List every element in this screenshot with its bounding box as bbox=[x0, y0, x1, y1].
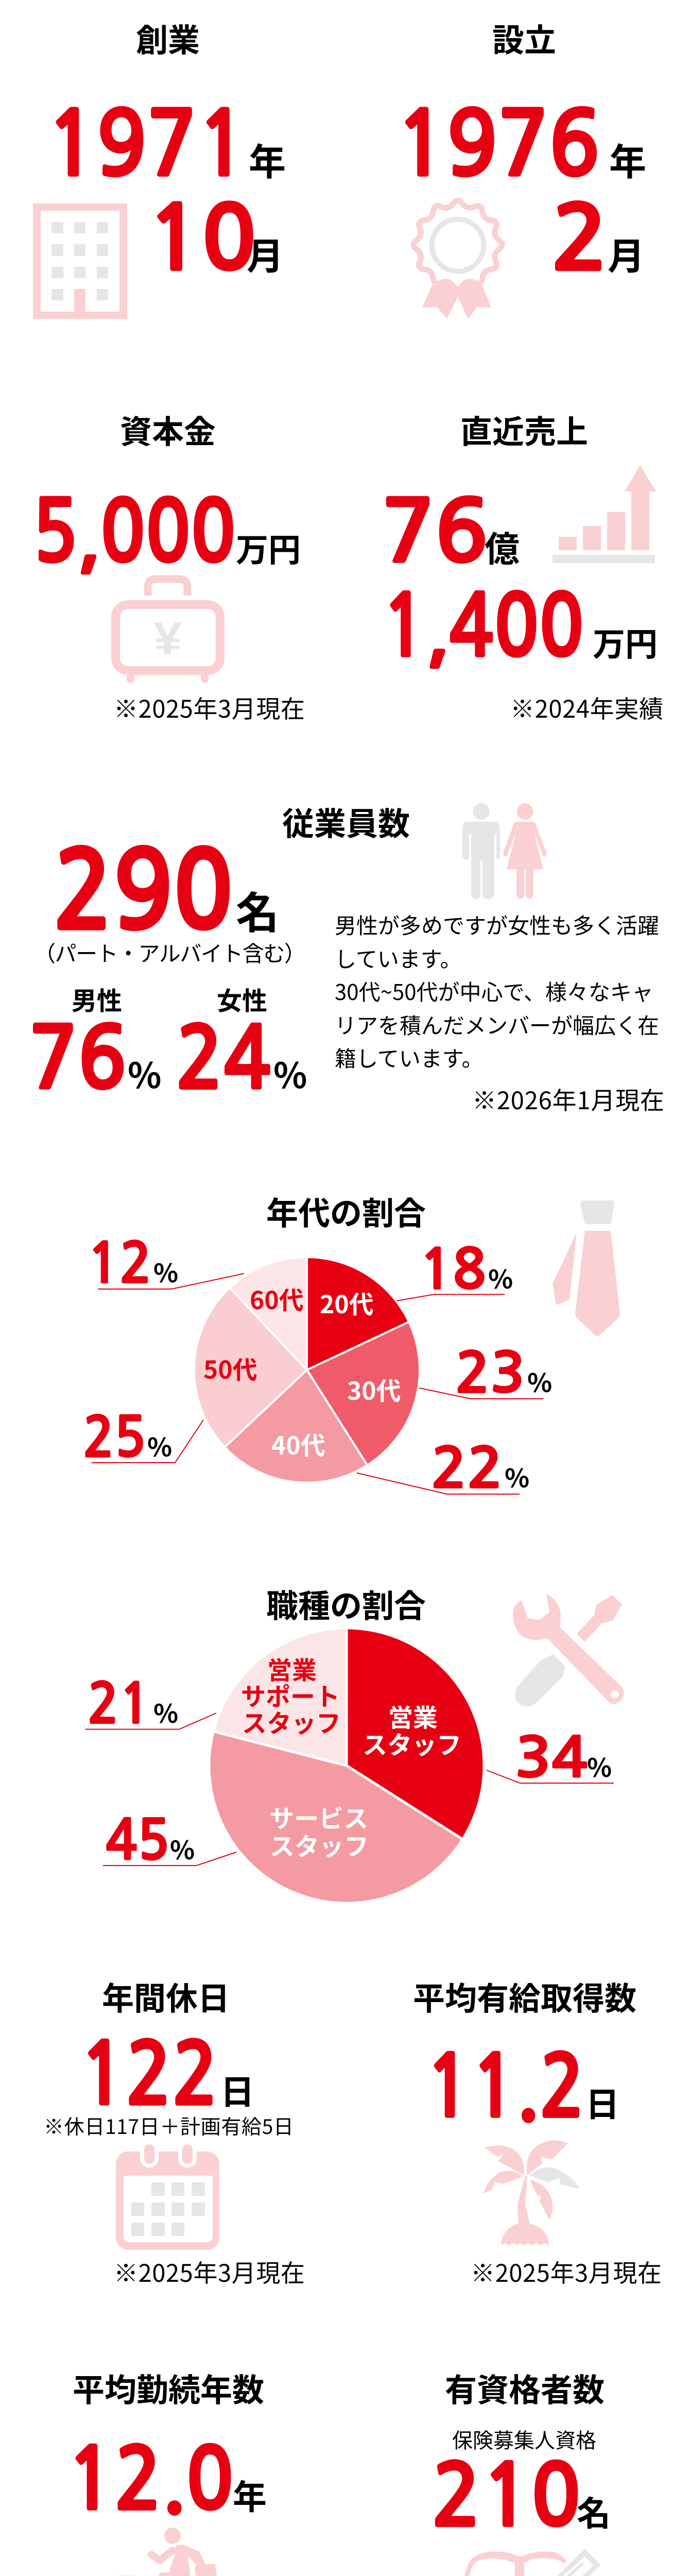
callout: 22 percent: 22 bbox=[431, 1442, 503, 1496]
panel: recent sales bbox=[382, 406, 663, 725]
panel: age ratio bbox=[83, 1188, 620, 1496]
icon: rising bar chart bbox=[553, 465, 656, 563]
pie labels: job types: スタッフ bbox=[363, 1725, 461, 1761]
number: 1976 year: 年 bbox=[609, 132, 646, 186]
callout: 22 percent: % bbox=[505, 1458, 529, 1495]
panel: establishment bbox=[395, 14, 646, 319]
pie labels: age groups: 30代 bbox=[347, 1371, 401, 1407]
text: employee description: しています。 bbox=[335, 942, 462, 974]
note: holiday breakdown: ※休日117日＋計画有給5日 bbox=[44, 2111, 294, 2140]
number: 210 people: 名 bbox=[577, 2486, 611, 2536]
icon: medal bbox=[413, 200, 502, 319]
stat: male ratio: 男性 bbox=[72, 981, 122, 1018]
stat: male ratio: % bbox=[128, 1047, 161, 1098]
pie labels: job types: スタッフ bbox=[270, 1826, 369, 1862]
panel: qualified staff bbox=[432, 2364, 663, 2576]
number: 12.0 years: 年 bbox=[233, 2470, 267, 2519]
icon: book and pencil bbox=[449, 2543, 606, 2576]
number: 11.2 days: 11.2 bbox=[425, 2045, 585, 2129]
callout: 18 percent: % bbox=[488, 1259, 513, 1296]
callout: 25 percent: % bbox=[147, 1427, 172, 1464]
heading: average tenure: 平均勤続年数 bbox=[73, 2364, 264, 2411]
stat: male ratio: 76 bbox=[29, 1016, 127, 1101]
note: capital date: ※2025年3月現在 bbox=[114, 689, 305, 725]
icon: suitcase bbox=[115, 579, 220, 683]
callout: 34 percent bbox=[487, 1731, 614, 1785]
text: employee description: 男性が多めですが女性も多く活躍 bbox=[335, 909, 659, 940]
text: insurance qualification: 保険募集人資格 bbox=[452, 2424, 596, 2454]
pie labels: job types: サポート bbox=[241, 1676, 340, 1713]
note: employee date: ※2026年1月現在 bbox=[472, 1081, 664, 1116]
number: October: 月 bbox=[247, 226, 284, 280]
pie labels: age groups: 20代 bbox=[320, 1284, 374, 1320]
heading: recent sales: 直近売上 bbox=[460, 406, 588, 452]
pie labels: age groups: 50代 bbox=[203, 1350, 257, 1386]
panel: capital bbox=[32, 406, 305, 725]
stat: male ratio bbox=[29, 981, 161, 1101]
panel: founding bbox=[33, 14, 286, 319]
callout: 21 percent: % bbox=[153, 1693, 178, 1731]
callout: 23 percent: % bbox=[527, 1363, 552, 1400]
heading: annual holidays: 年間休日 bbox=[102, 1973, 230, 2019]
icon: tools bbox=[513, 1594, 624, 1706]
panel: average tenure bbox=[66, 2364, 310, 2576]
pie labels: job types: 営業 bbox=[388, 1698, 438, 1734]
text: employee description: 30代~50代が中心で、様々なキャ bbox=[335, 975, 653, 1007]
number: 122 days: 122 bbox=[79, 2032, 218, 2117]
stat: female ratio: 24 bbox=[176, 1016, 271, 1101]
stat: female ratio: 女性 bbox=[217, 981, 267, 1018]
callout: 34 percent: % bbox=[587, 1748, 612, 1785]
heading: job type ratio: 職種の割合 bbox=[266, 1580, 426, 1626]
panel: job type ratio bbox=[85, 1580, 624, 1903]
callout: 12 percent bbox=[87, 1236, 244, 1291]
icon: suitcase: ¥ bbox=[153, 613, 182, 664]
text: employee description bbox=[335, 909, 659, 1073]
number: 11.2 days: 日 bbox=[585, 2077, 619, 2127]
pie chart: job types bbox=[209, 1628, 484, 1903]
note: holiday date: ※2025年3月現在 bbox=[114, 2253, 305, 2289]
panel: annual holidays bbox=[44, 1973, 305, 2289]
stat: female ratio: % bbox=[273, 1047, 307, 1098]
callout: 25 percent: 25 bbox=[83, 1411, 146, 1465]
note: including part timers: （パート・アルバイト含む） bbox=[34, 937, 306, 968]
stat: female ratio bbox=[176, 981, 307, 1101]
heading: qualified staff: 有資格者数 bbox=[445, 2364, 605, 2411]
pie labels: age groups: 60代 bbox=[250, 1280, 304, 1316]
number: 1971 year: 年 bbox=[249, 132, 286, 186]
pie labels: age groups bbox=[203, 1280, 401, 1462]
number: 50 million yen: 万円 bbox=[236, 524, 301, 571]
callout: 23 percent bbox=[419, 1346, 552, 1400]
callout: 22 percent bbox=[357, 1442, 529, 1496]
number: 1976 year: 1976 bbox=[395, 100, 600, 189]
number: 1400 man yen: 万円 bbox=[593, 619, 658, 666]
number: 50 million yen: 5,000 bbox=[32, 490, 236, 574]
pie labels: job types bbox=[241, 1650, 461, 1862]
number: 290 people: 290 bbox=[53, 838, 233, 944]
heading: age ratio: 年代の割合 bbox=[266, 1188, 426, 1234]
callout: 21 percent: 21 bbox=[88, 1677, 150, 1731]
icon: building bbox=[33, 204, 127, 319]
heading: founding: 創業 bbox=[136, 14, 200, 61]
number: 290 people: 名 bbox=[236, 879, 279, 941]
icon: palm tree bbox=[484, 2140, 579, 2246]
number: February: 月 bbox=[608, 226, 645, 280]
pie labels: job types: 営業 bbox=[267, 1650, 317, 1686]
callout: 23 percent: 23 bbox=[455, 1346, 525, 1400]
heading: paid leave: 平均有給取得数 bbox=[413, 1973, 636, 2019]
text: employee description: 籍しています。 bbox=[335, 1042, 484, 1073]
note: paid leave date: ※2025年3月現在 bbox=[471, 2253, 662, 2289]
note: sales date: ※2024年実績 bbox=[510, 689, 663, 725]
panel: employees bbox=[29, 798, 664, 1116]
text: employee description: リアを積んだメンバーが幅広く在 bbox=[335, 1009, 659, 1040]
heading: employees: 従業員数 bbox=[282, 798, 410, 844]
number: 1400 man yen: 1,400 bbox=[382, 584, 584, 669]
number: 12.0 years: 12.0 bbox=[66, 2437, 234, 2522]
pie chart: age groups bbox=[194, 1257, 420, 1483]
number: 1971 year: 1971 bbox=[46, 100, 247, 189]
number: 210 people: 210 bbox=[432, 2454, 581, 2538]
callout: 21 percent bbox=[85, 1677, 216, 1731]
callout: 45 percent: % bbox=[170, 1830, 195, 1867]
number: October: 10 bbox=[147, 195, 256, 283]
icon: necktie bbox=[553, 1200, 620, 1336]
pie labels: age groups: 40代 bbox=[271, 1426, 325, 1462]
number: February: 2 bbox=[551, 195, 609, 283]
icon: calendar bbox=[116, 2144, 219, 2250]
panel: paid leave bbox=[413, 1973, 662, 2289]
callout: 12 percent: % bbox=[153, 1253, 178, 1290]
pie labels: job types: スタッフ bbox=[242, 1703, 341, 1739]
callout: 12 percent: 12 bbox=[87, 1236, 152, 1291]
callout: 18 percent: 18 bbox=[419, 1243, 486, 1297]
number: February bbox=[551, 195, 645, 283]
heading: establishment: 設立 bbox=[492, 14, 556, 61]
heading: capital: 資本金 bbox=[120, 406, 216, 452]
pie labels: job types: サービス bbox=[269, 1799, 368, 1835]
number: 76 oku: 億 bbox=[485, 521, 520, 572]
callout: 45 percent: 45 bbox=[106, 1814, 169, 1868]
number: 76 oku: 76 bbox=[382, 490, 488, 574]
number: 122 days: 日 bbox=[220, 2065, 254, 2114]
icon: man and woman bbox=[462, 803, 546, 900]
icon: runner on stairs bbox=[118, 2528, 217, 2576]
callout: 25 percent bbox=[83, 1411, 203, 1465]
callout: 45 percent bbox=[103, 1814, 236, 1868]
callout: 34 percent: 34 bbox=[515, 1731, 588, 1785]
callout: 18 percent bbox=[396, 1243, 513, 1301]
